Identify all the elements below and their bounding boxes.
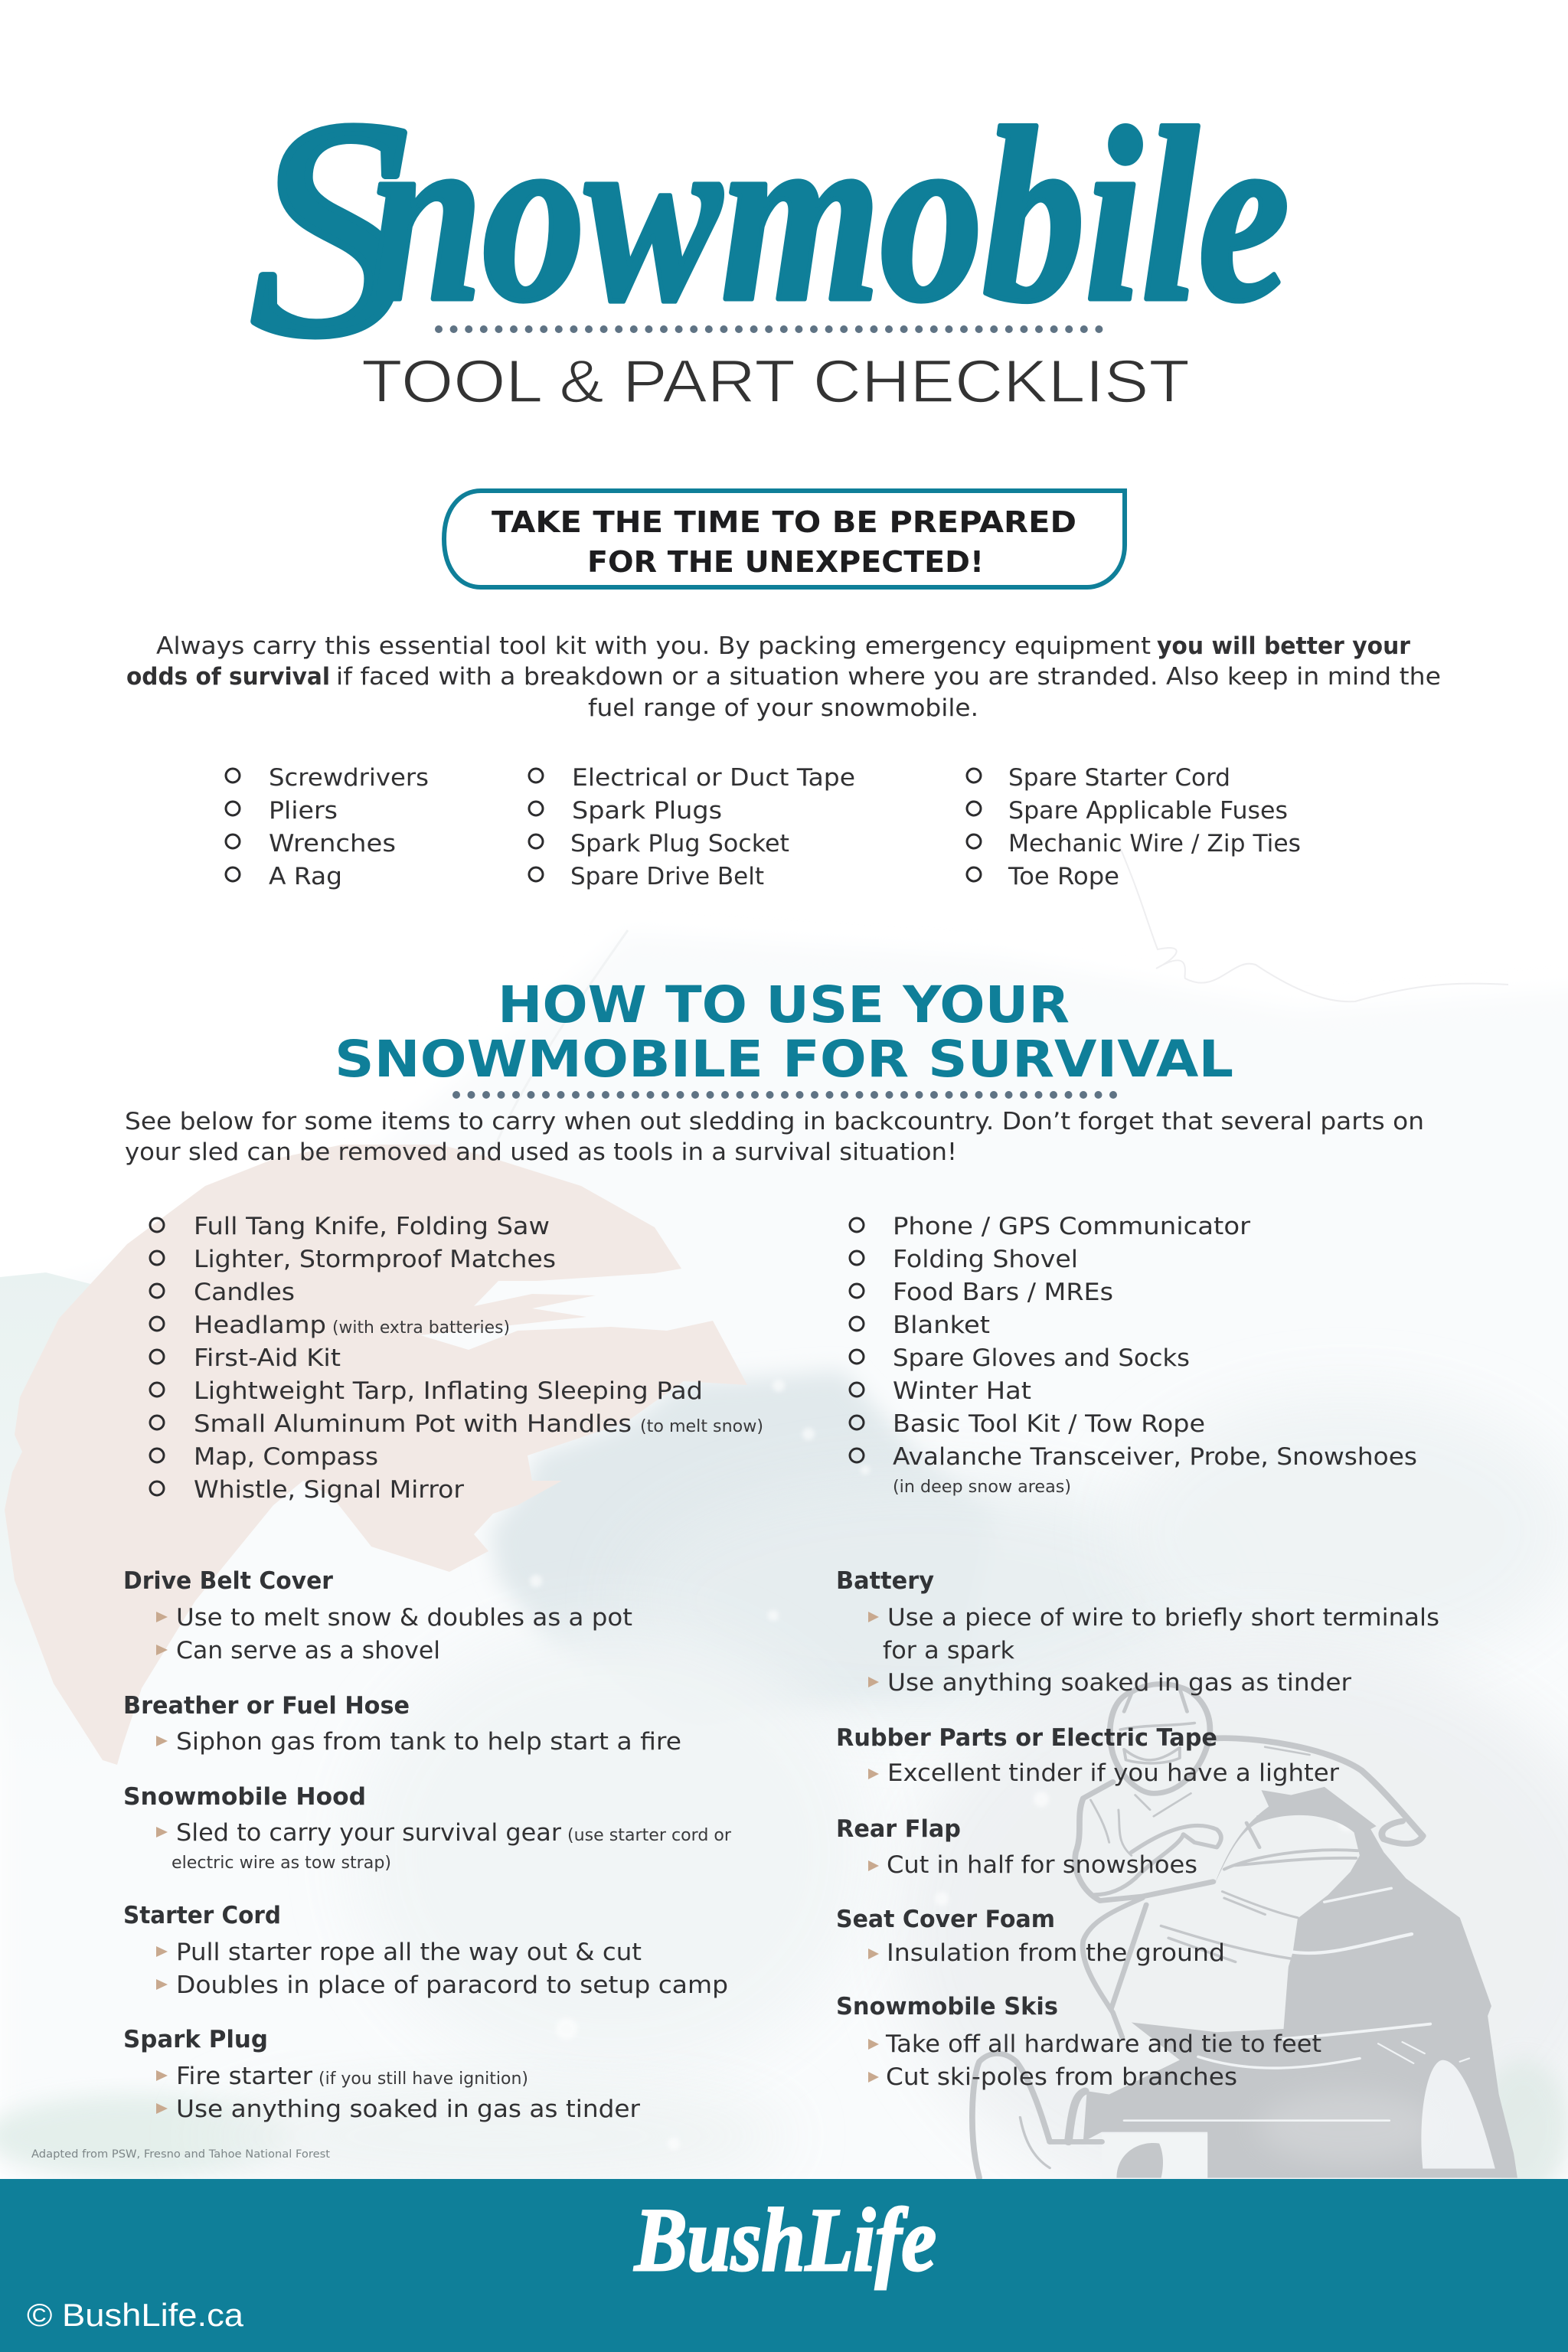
panel: rubber parts or electric tape: Rubber Parts or Electric Tape <box>836 1724 1217 1752</box>
tool checklist column 3: Mechanic Wire / Zip Ties <box>1008 830 1301 858</box>
panel: drive belt cover <box>123 1567 632 1664</box>
survival items list right: Spare Gloves and Socks <box>893 1344 1190 1372</box>
panel: snowmobile hood: Snowmobile Hood <box>123 1783 366 1811</box>
tool checklist column 1: Screwdrivers <box>269 764 429 792</box>
callout: take the time: TAKE THE TIME TO BE PREPARED <box>492 505 1076 539</box>
title: S <box>251 56 408 400</box>
subtitle: TOOL & PART CHECKLIST <box>361 347 1190 415</box>
tool checklist column 3: Spare Applicable Fuses <box>1008 797 1288 825</box>
tool checklist column 2: Electrical or Duct Tape <box>572 764 855 792</box>
intro text block: fuel range of your snowmobile. <box>588 694 978 722</box>
callout: take the time <box>444 491 1125 587</box>
panel: battery <box>836 1567 1439 1697</box>
panel: seat cover foam: Insulation from the ground <box>887 1939 1225 1967</box>
survival items list left: (with extra batteries) <box>332 1318 510 1338</box>
heading dotted divider <box>456 1091 1115 1099</box>
panel: breather or fuel hose <box>123 1692 681 1756</box>
panel: starter cord <box>123 1902 728 1999</box>
survival items list right <box>850 1213 1417 1497</box>
survival items list right: Phone / GPS Communicator <box>893 1213 1250 1240</box>
panel: seat cover foam: Seat Cover Foam <box>836 1906 1055 1933</box>
intro text block: if faced with a breakdown or a situation where you are stranded. Also keep in mind the <box>336 663 1441 691</box>
callout: take the time: FOR THE UNEXPECTED! <box>587 545 984 579</box>
heading: how to use your snowmobile for survival: HOW TO USE YOUR <box>498 975 1070 1034</box>
intro text block: you will better your <box>1157 632 1411 660</box>
survival intro text: See below for some items to carry when out sledding in backcountry. Don’t forget that several parts on <box>125 1108 1424 1135</box>
survival items list right: Winter Hat <box>893 1377 1031 1405</box>
tool checklist column 2: Spark Plug Socket <box>570 830 789 858</box>
tool checklist column 1 <box>226 764 429 890</box>
panel: rear flap: Cut in half for snowshoes <box>887 1851 1197 1879</box>
title <box>251 56 1289 400</box>
survival items list left: Candles <box>194 1279 295 1306</box>
survival items list left: (to melt snow) <box>640 1417 763 1436</box>
survival intro text <box>125 1108 1424 1166</box>
panel: drive belt cover: Can serve as a shovel <box>176 1637 440 1664</box>
footer copyright: © BushLife.ca <box>27 2297 244 2333</box>
intro text block <box>126 632 1441 722</box>
survival items list right: Blanket <box>893 1312 990 1339</box>
survival items list left: Small Aluminum Pot with Handles <box>194 1410 632 1438</box>
intro text block: Always carry this essential tool kit with you. By packing emergency equipment <box>156 632 1151 660</box>
panel: starter cord: Doubles in place of paracord to setup camp <box>176 1971 728 1999</box>
title: nowmobile <box>369 77 1289 353</box>
panel: battery: Battery <box>836 1567 934 1595</box>
tool checklist column 2 <box>529 764 855 890</box>
survival items list left: Headlamp <box>194 1312 326 1339</box>
panel: battery: Use a piece of wire to briefly short terminals <box>887 1604 1439 1632</box>
tool checklist column 3 <box>967 764 1301 890</box>
panel: starter cord: Pull starter rope all the way out & cut <box>176 1939 642 1966</box>
icon: snowmobile rider illustration <box>972 1684 1517 2177</box>
tool checklist column 3: Spare Starter Cord <box>1008 764 1230 792</box>
survival items list left: Map, Compass <box>194 1443 378 1471</box>
footer logo: BushLife <box>633 2190 936 2290</box>
tool checklist column 1: A Rag <box>269 863 342 890</box>
survival items list left: Lightweight Tarp, Inflating Sleeping Pad <box>194 1377 703 1405</box>
survival intro text: your sled can be removed and used as tools in a survival situation! <box>125 1138 957 1166</box>
survival items list right: (in deep snow areas) <box>893 1478 1071 1497</box>
panel: drive belt cover: Drive Belt Cover <box>123 1567 334 1595</box>
survival items list left: Lighter, Stormproof Matches <box>194 1246 556 1273</box>
tool checklist column 3: Toe Rope <box>1008 863 1119 890</box>
panel: snowmobile hood: electric wire as tow strap) <box>172 1854 391 1873</box>
panel: rear flap: Rear Flap <box>836 1815 961 1843</box>
intro text block: odds of survival <box>126 663 330 691</box>
tool checklist column 2: Spare Drive Belt <box>570 863 764 890</box>
footer band <box>0 2179 1568 2352</box>
heading: how to use your snowmobile for survival <box>335 975 1233 1089</box>
panel: spark plug: Spark Plug <box>123 2026 268 2053</box>
panel: rubber parts or electric tape: Excellent tinder if you have a lighter <box>887 1759 1339 1787</box>
survival items list right: Folding Shovel <box>893 1246 1078 1273</box>
heading: how to use your snowmobile for survival: SNOWMOBILE FOR SURVIVAL <box>335 1030 1233 1089</box>
panel: starter cord: Starter Cord <box>123 1902 281 1929</box>
survival items list right: Avalanche Transceiver, Probe, Snowshoes <box>893 1443 1417 1471</box>
panel: breather or fuel hose: Siphon gas from tank to help start a fire <box>176 1728 681 1756</box>
panel: drive belt cover: Use to melt snow & doubles as a pot <box>176 1604 632 1632</box>
tool checklist column 1: Wrenches <box>269 830 396 858</box>
panel: snowmobile hood <box>123 1783 732 1873</box>
panel: seat cover foam <box>836 1906 1225 1967</box>
panel: battery: Use anything soaked in gas as tinder <box>887 1669 1351 1697</box>
panel: rear flap <box>836 1815 1197 1879</box>
source note: Adapted from PSW, Fresno and Tahoe National Forest <box>31 2148 331 2161</box>
survival items list right: Basic Tool Kit / Tow Rope <box>893 1410 1205 1438</box>
panel: spark plug: Fire starter <box>176 2063 312 2090</box>
survival items list left: Whistle, Signal Mirror <box>194 1476 464 1504</box>
panel: snowmobile hood: (use starter cord or <box>567 1826 732 1845</box>
title dotted divider <box>439 325 1100 333</box>
panel: snowmobile skis <box>836 1993 1321 2091</box>
survival items list left <box>150 1213 763 1504</box>
survival items list left: Full Tang Knife, Folding Saw <box>194 1213 550 1240</box>
panel: spark plug <box>123 2026 640 2123</box>
panel: spark plug: (if you still have ignition) <box>318 2069 528 2089</box>
tool checklist column 2: Spark Plugs <box>572 797 722 825</box>
panel: rubber parts or electric tape <box>836 1724 1339 1787</box>
panel: snowmobile skis: Take off all hardware and tie to feet <box>885 2030 1321 2058</box>
panel: battery: for a spark <box>883 1637 1014 1664</box>
panel: breather or fuel hose: Breather or Fuel Hose <box>123 1692 410 1720</box>
panel: snowmobile skis: Cut ski-poles from branches <box>886 2063 1237 2091</box>
panel: snowmobile hood: Sled to carry your survival gear <box>176 1819 561 1847</box>
panel: snowmobile skis: Snowmobile Skis <box>836 1993 1058 2020</box>
survival items list right: Food Bars / MREs <box>893 1279 1113 1306</box>
survival items list left: First-Aid Kit <box>194 1344 341 1372</box>
tool checklist column 1: Pliers <box>269 797 338 825</box>
panel: spark plug: Use anything soaked in gas as tinder <box>176 2096 640 2123</box>
